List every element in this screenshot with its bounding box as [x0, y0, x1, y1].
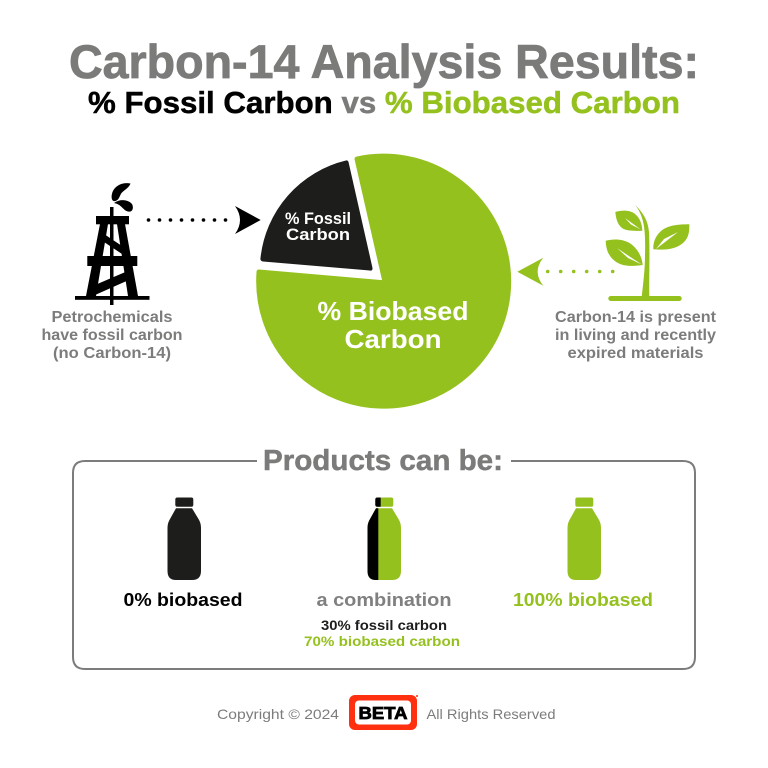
icon: green bottle [568, 498, 601, 580]
text: carbon-14 note [555, 309, 716, 362]
leaves [615, 211, 642, 231]
icon: half and half bottle [368, 498, 401, 580]
title: Carbon-14 Analysis Results: [69, 35, 699, 88]
panel: products can be [73, 445, 695, 669]
pie slice: fossil carbon: % Fossil [285, 209, 351, 228]
rights text: All Rights Reserved [426, 706, 556, 722]
copyright text: Copyright © 2024 [217, 706, 339, 722]
text: petrochemicals note: Petrochemicals [52, 309, 172, 326]
pie slice: biobased carbon: % Biobased [318, 296, 468, 326]
text: carbon-14 note: Carbon-14 is present [555, 309, 716, 326]
title: % Fossil Carbon vs % Biobased Carbon [88, 85, 680, 120]
title [69, 35, 699, 120]
label: 0% biobased: 0% biobased [124, 590, 242, 610]
leaf veins [625, 218, 641, 230]
pie slice: fossil carbon [261, 161, 372, 270]
text: petrochemicals note: (no Carbon-14) [53, 345, 171, 362]
footer [217, 695, 556, 730]
label: 70% biobased carbon: 70% biobased carbon [304, 633, 460, 649]
panel heading: Products can be: [263, 445, 503, 477]
icon: black bottle [168, 498, 201, 580]
arrow: plant to pie [517, 258, 614, 286]
base [608, 296, 682, 301]
text: petrochemicals note [42, 309, 182, 362]
pie slice: biobased carbon [257, 154, 511, 408]
pie slice: fossil carbon: Carbon [286, 225, 350, 244]
pie chart [257, 154, 511, 408]
icon: oil derrick [75, 183, 150, 305]
stem [635, 205, 649, 297]
icon: plant seedling [606, 205, 689, 301]
text: carbon-14 note: expired materials [568, 345, 704, 362]
logo: BETA: BETA [358, 703, 408, 723]
label: a combination: a combination [316, 590, 452, 610]
logo: BETA [349, 695, 418, 730]
oil drops [112, 183, 130, 201]
label: 100% biobased: 100% biobased [513, 590, 653, 610]
derrick [110, 207, 114, 305]
text: carbon-14 note: in living and recently [555, 327, 716, 344]
text: petrochemicals note: have fossil carbon [42, 327, 182, 344]
label: 30% fossil carbon: 30% fossil carbon [321, 617, 447, 633]
arrow: fossil to pie [147, 206, 261, 234]
pie slice: biobased carbon: Carbon [344, 324, 442, 354]
